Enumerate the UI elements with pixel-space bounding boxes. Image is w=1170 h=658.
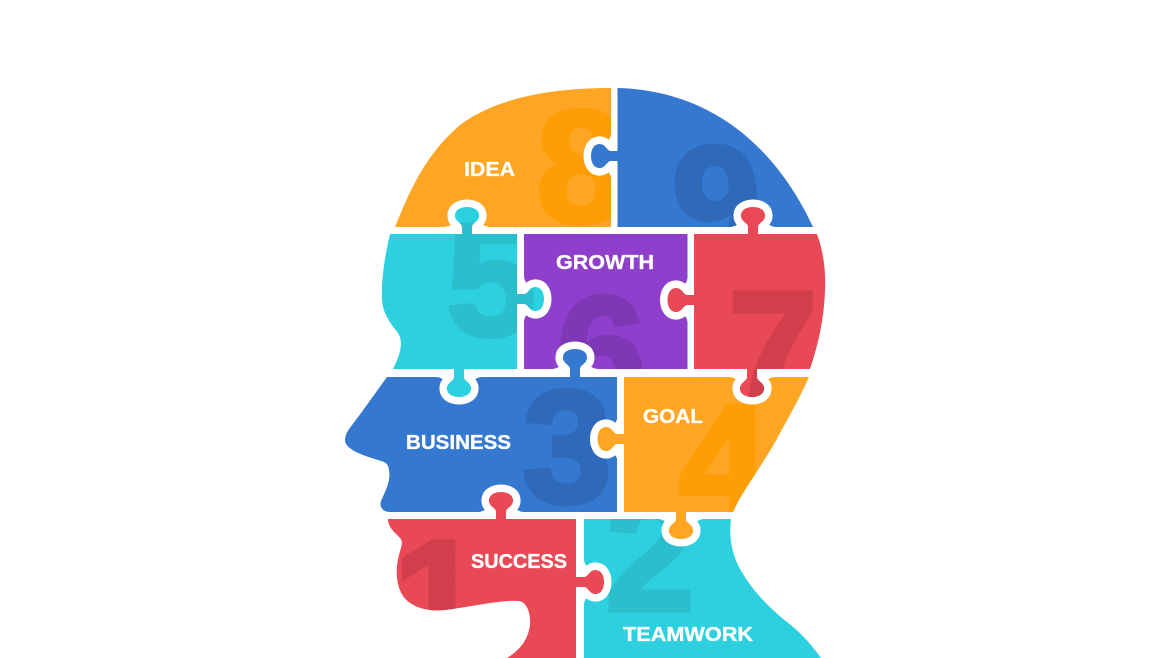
panel: blue number nine puzzle piece — [584, 88, 813, 227]
panel: goal puzzle piece — [598, 371, 809, 550]
number 2: 2 — [606, 465, 694, 644]
panel: teamwork puzzle piece — [584, 519, 821, 658]
number 8: 8 — [537, 77, 625, 256]
label: growth: GROWTH — [556, 252, 654, 274]
label: business: BUSINESS — [406, 432, 511, 454]
puzzle head illustration — [345, 77, 825, 658]
label: goal: GOAL — [643, 406, 703, 428]
number 4: 4 — [680, 371, 769, 550]
panel: idea puzzle piece — [395, 88, 611, 227]
panel: red number seven puzzle piece — [668, 207, 825, 437]
panel: business puzzle piece — [345, 349, 617, 536]
label: teamwork: TEAMWORK — [623, 624, 754, 646]
number 7: 7 — [729, 258, 817, 437]
number 9: 9 — [672, 113, 760, 292]
panel: success puzzle piece — [388, 492, 604, 658]
label: idea: IDEA — [464, 159, 515, 181]
label: success: SUCCESS — [471, 551, 567, 573]
number 3: 3 — [523, 357, 611, 536]
number 6: 6 — [557, 263, 645, 442]
panel: growth puzzle piece — [524, 234, 688, 369]
panel: cyan number five puzzle piece — [382, 190, 544, 397]
number 5: 5 — [447, 190, 535, 369]
